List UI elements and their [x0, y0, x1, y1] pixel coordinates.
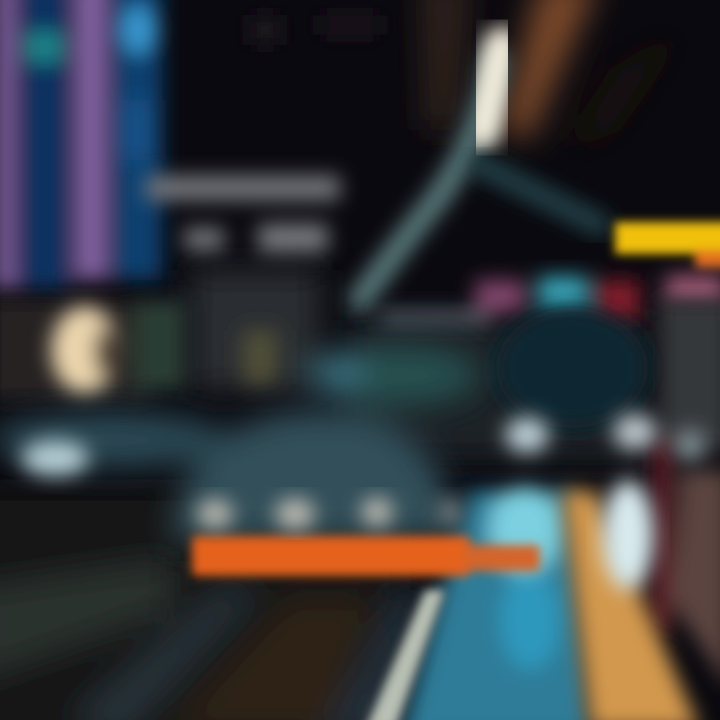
right side wall [652, 300, 720, 690]
icon: glowing lamp [51, 306, 119, 394]
coloured lights [380, 275, 720, 326]
platform white line [365, 590, 445, 720]
platform yellow stripe [562, 490, 700, 720]
teal arch [0, 345, 480, 540]
yellow sign [615, 222, 720, 268]
orange banner [192, 536, 540, 576]
platform blue [400, 486, 590, 720]
faint top sign [250, 15, 380, 45]
lower left floor and tracks [0, 490, 430, 720]
lower left pillar band [0, 300, 278, 400]
banner lights [197, 497, 460, 530]
light streak [360, 45, 600, 300]
neon columns [0, 0, 162, 290]
dark round sign [496, 308, 648, 428]
bright column [602, 480, 654, 590]
blurred sign heading [146, 176, 340, 252]
white highlight patches [21, 414, 706, 476]
upper background brown structure [190, 0, 680, 460]
